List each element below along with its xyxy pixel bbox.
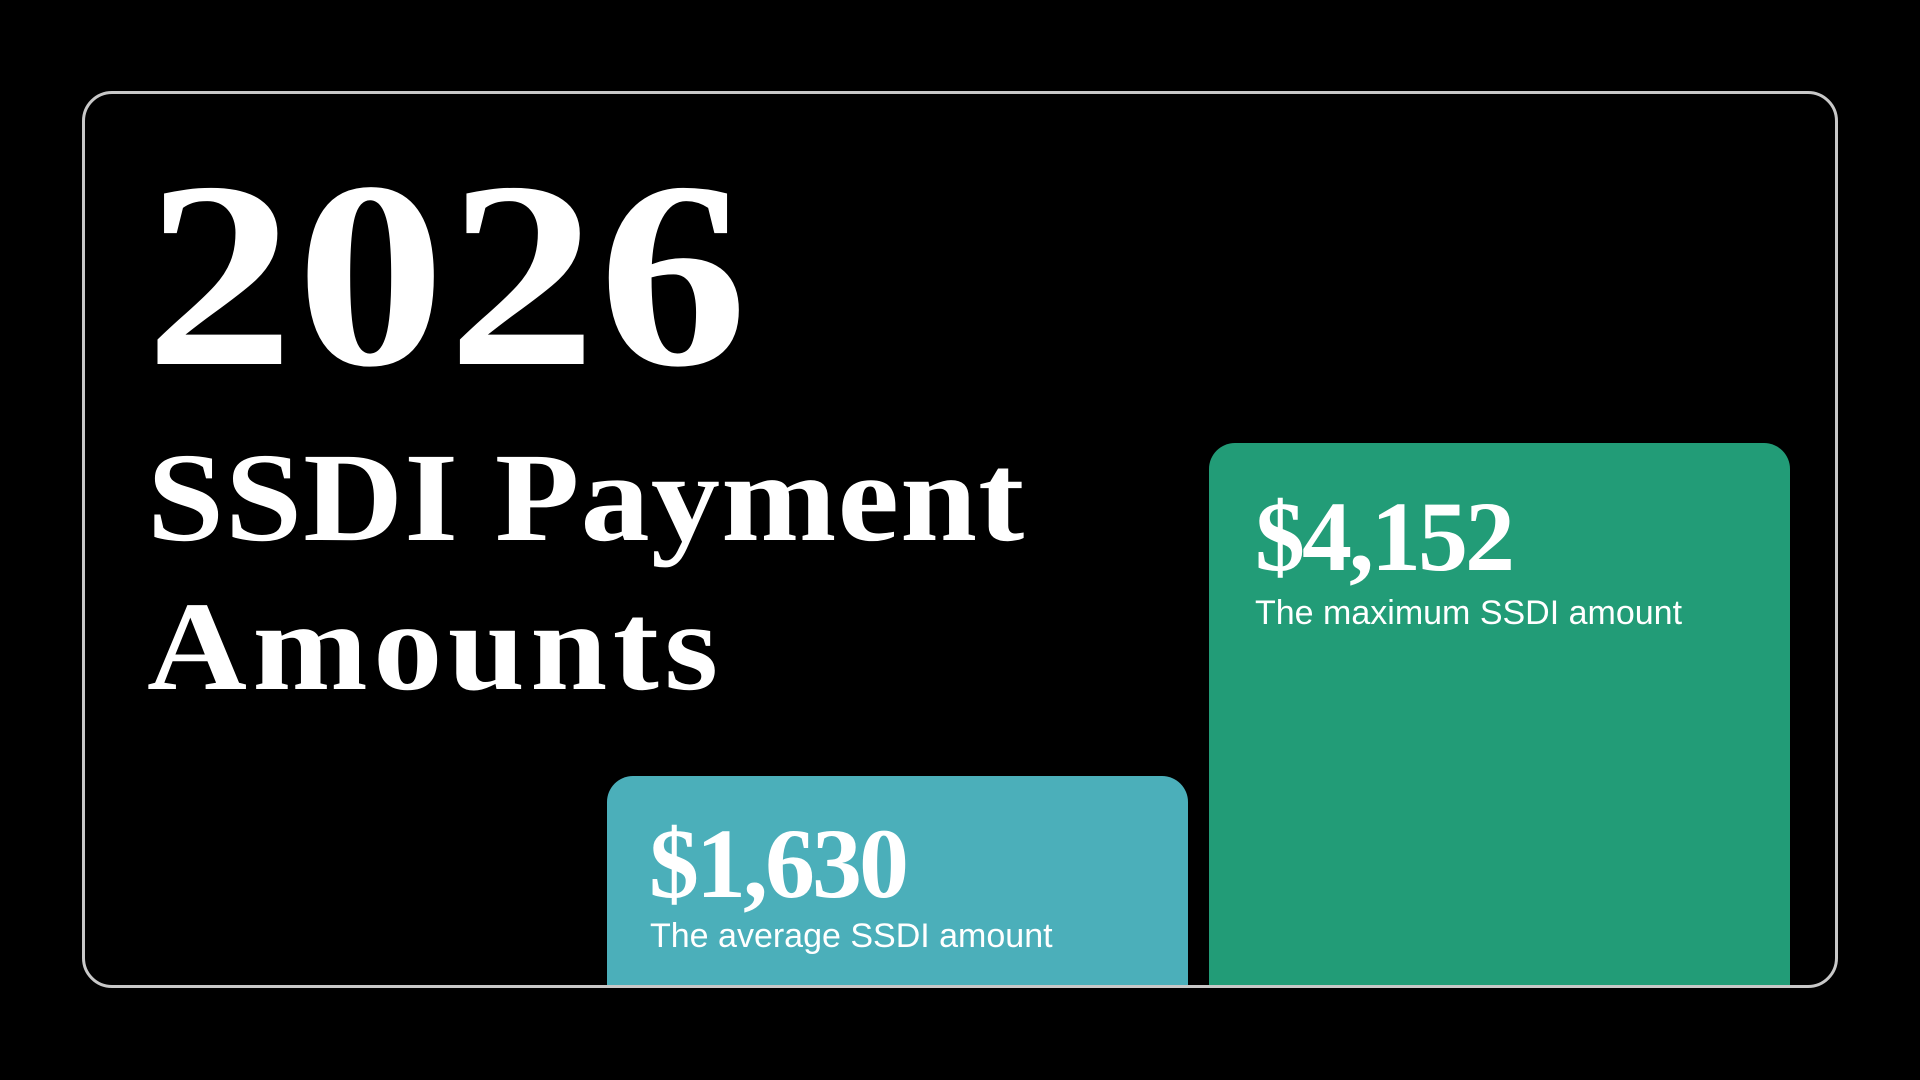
title: subtitle: [147, 428, 1025, 717]
label: maximum: The maximum SSDI amount: [1255, 594, 1682, 632]
panel: frame: [82, 91, 1838, 988]
value: maximum: $4,152: [1255, 481, 1512, 592]
title: subtitle: SSDI Payment: [147, 428, 1025, 568]
title: year: 2026: [145, 127, 750, 422]
label: average: The average SSDI amount: [650, 917, 1053, 955]
title: subtitle: Amounts: [147, 577, 724, 717]
bar: average: [607, 776, 1188, 996]
bar: maximum: [1209, 443, 1790, 1003]
value: average: $1,630: [649, 808, 906, 919]
